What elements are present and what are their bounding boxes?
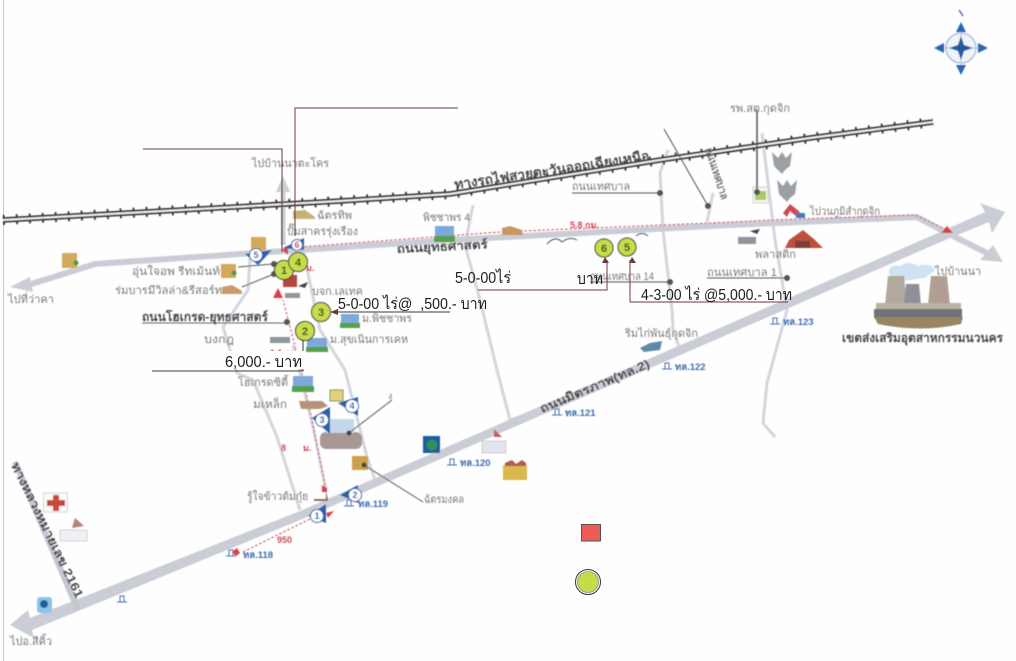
road: Mittraphap highway [10, 203, 1005, 638]
icon: small sign Bongkot [270, 337, 290, 343]
legend: red square [582, 524, 600, 541]
icon: roof Chat Thip [293, 210, 315, 219]
dark leader lines [572, 110, 786, 282]
annotation: plot 6 price: บาท [577, 271, 603, 288]
label: to Na Takhro: ไปบ้านนาตะโคร [251, 156, 329, 170]
label: Yuthasat road: ถนนยุทธศาสตร์ [396, 237, 489, 257]
pointer: Chat Mongkol [362, 462, 423, 502]
icon: house near junction [251, 237, 266, 250]
icon: store sign [330, 390, 343, 401]
icon: school [482, 429, 506, 453]
route marker 1 [308, 504, 326, 523]
icon: small building Letek [285, 282, 308, 298]
pointer: temple [346, 400, 392, 436]
label: km 118: ทล.118 [243, 550, 273, 561]
icon: green logo [423, 436, 440, 453]
green plot marker 2 [296, 322, 314, 340]
label: km 121: ทล.121 [565, 408, 596, 419]
icon: rice shop [314, 491, 328, 501]
icon: gold box Chat Mongkol [352, 456, 368, 470]
annotation arrowheads [330, 257, 636, 315]
green plot marker 5 [618, 238, 636, 256]
legend: green circle [576, 570, 600, 594]
label: m unit near junction: ม. [306, 263, 314, 273]
icon: red pointer triangle [273, 288, 283, 298]
arrowhead: to Tha Ka [10, 277, 33, 292]
route marker 6: 6 [294, 240, 300, 250]
icon: steel shop [299, 401, 328, 409]
road: highway 2161 [15, 462, 78, 610]
route marker 4 [338, 397, 358, 416]
label: municipal road: ถนนเทศบาล [572, 181, 630, 193]
label: steel shop: มเหล็ก [253, 397, 287, 411]
label: to Kut Chik: ไปวนภูมิสำกุดจิก [809, 205, 880, 218]
label: distance 950: 950 [277, 535, 292, 545]
icon: housing Hokrat City [292, 376, 314, 392]
icon: blue factory [640, 341, 662, 352]
label: railway: ทางรถไฟสายตะวันออกเฉียงเหนือ [453, 147, 650, 192]
road: north to Na Takhro [280, 190, 286, 245]
label: municipal road 14: ถนนเทศบาล 14 [590, 271, 654, 283]
label: fuel station: ปั๊มสาครรุ่งเรือง [287, 223, 358, 238]
label: Letek company: บจก.เลเทค [312, 286, 363, 298]
annotation: plot 5 area and price: 4-3-00 ไร่ @5,000.- บาท [641, 285, 792, 304]
label: Un Jai apartment: อุ่นใจอพ รีทเม้นท์ [132, 265, 220, 278]
label: Chokrat-Yuthasat road: ถนนโฮเกรด-ยุทธศาสตร์ [142, 309, 269, 325]
green plot marker 2: 2 [302, 326, 308, 338]
milestone icons [117, 318, 780, 602]
route marker 1: 1 [314, 511, 320, 521]
green plot marker 6 [595, 239, 613, 257]
icon: roof on Yuthasat [502, 226, 523, 235]
icon: garuda upper [772, 152, 792, 174]
icon: power plant [874, 263, 963, 328]
label: km 123: ทล.123 [783, 317, 814, 328]
green plot marker 4: 4 [295, 257, 302, 269]
icon: flag sign [783, 204, 805, 218]
compass [934, 10, 988, 75]
green plot marker 5: 5 [624, 242, 630, 254]
label: Rim Kai: ริมไก่พันธุ์กุดจิก [624, 327, 698, 340]
icon: blue school badge [37, 597, 52, 613]
icon: house west road [62, 253, 78, 268]
route marker 2 [340, 485, 362, 503]
label: municipal road 1: ถนนเทศบาล 1 [707, 267, 777, 279]
pointer: Chokrat road [142, 319, 290, 325]
label: temple pointer: ง [388, 391, 392, 401]
label: vertical municipal road: ถนนเทศบาล [702, 146, 730, 202]
icon: temple [320, 419, 362, 449]
icon: deer sign [60, 518, 87, 541]
route marker 5 [245, 248, 272, 265]
green plot marker 3 [312, 302, 330, 322]
railway [3, 122, 933, 220]
label: Mittraphap road: ถนนมิตรภาพ(ทล.2) [538, 357, 652, 416]
route marker 6 [283, 238, 304, 250]
annotation lines [143, 108, 788, 371]
label: to Ban Na: ไปบ้านนา [934, 265, 981, 278]
white label backing [222, 351, 305, 369]
label: Chat Thip: ฉัตรทิพ [317, 210, 352, 222]
pointer: Rom Barami [242, 271, 277, 287]
route marker 3: 3 [319, 415, 325, 425]
red dotted route: south [243, 300, 326, 552]
icon: gift boxes [503, 460, 527, 480]
label: km 120: ทล.120 [460, 458, 491, 469]
icon: Rom Barami resort [222, 285, 242, 294]
label: km 119: ทล.119 [358, 499, 388, 510]
annotation: plot 2 price: 6,000.- บาท [225, 354, 302, 371]
red marker tips [232, 226, 953, 556]
route marker 4: 4 [349, 401, 355, 411]
label: rice shop: รู้ใจข้าวต้มกุ๋ย [247, 490, 308, 503]
label: Plastic: พลาสติก [755, 249, 796, 261]
icon: hospital cross [44, 493, 68, 512]
icon: red arrow junction [282, 246, 288, 255]
label: Sukpanit village: ม.สุขเนินการเคห [330, 334, 408, 346]
icon: red building [283, 275, 297, 287]
icon: housing Pitchaporn 4 [434, 226, 455, 242]
label: Pitchaporn 4: พิชชาพร 4 [423, 212, 470, 224]
label: Bongkot: บงกฎ [204, 334, 234, 346]
label: km 122: ทล.122 [675, 362, 706, 373]
red dotted route: Yuthasat [300, 215, 947, 247]
route marker 2: 2 [352, 490, 358, 500]
green plot marker 1: 1 [281, 265, 287, 277]
label: Hokrat City: โฮเกรดซิตี้ [238, 374, 289, 389]
route marker 3 [312, 407, 330, 434]
icon: red roof market [785, 230, 823, 248]
annotation: plot 6 area: 5-0-00ไร่ [455, 268, 511, 287]
icon: municipal office [753, 187, 768, 203]
label: to Tha Ka: ไปที่ว่าคา [7, 291, 54, 306]
pointer: Un Jai [238, 261, 277, 267]
icon: housing Pitchaporn [340, 314, 360, 328]
leader dots [657, 189, 790, 285]
icon: birds east [547, 234, 648, 244]
arrowhead: north [276, 176, 290, 192]
label: highway 2161: ทางหลวงหมายเลข 2161 [8, 460, 86, 601]
label: distance 1.1 km: 1.1 กม. [270, 348, 299, 358]
green plot marker 4 [288, 252, 308, 272]
label: Nava Nakorn zone: เขตส่งเสริมอุตสาหกรรมนวนคร [842, 331, 1004, 346]
annotation: plot 3 area and price: 5-0-00 ไร่@ ,500.- บาท [338, 294, 487, 313]
label: to Sikhio: ไปอ.สีคิ้ว [9, 633, 52, 648]
minor roads [223, 133, 787, 510]
label: distance 8: 8 [281, 443, 286, 453]
road: Yuthasat [22, 217, 993, 287]
green plot marker 6: 6 [601, 243, 607, 255]
label: km unit: ม. [303, 443, 311, 453]
label: Kut Chik health station: รพ.สต.กุดจิก [730, 103, 790, 115]
icon: small building by road [738, 229, 760, 244]
icon: Un Jai apartment [221, 264, 236, 278]
arrowhead: to Ban Na [980, 245, 1003, 262]
icon: garuda lower [777, 180, 797, 202]
label: distance 5.8 km: 5.8 กม. [570, 220, 599, 230]
green plot marker 1 [274, 260, 294, 280]
green plot marker 3: 3 [318, 307, 324, 319]
route marker 5: 5 [253, 250, 259, 260]
label: Chat Mongkol: ฉัตรมงคล [424, 494, 464, 506]
label: Pitchaporn village: ม.พิชชาพร [362, 313, 412, 325]
icon: housing Sukpanit [306, 338, 328, 352]
label: Rom Barami resort: ร่มบารมีวิลล่า&รีสอร์ท [115, 284, 222, 297]
